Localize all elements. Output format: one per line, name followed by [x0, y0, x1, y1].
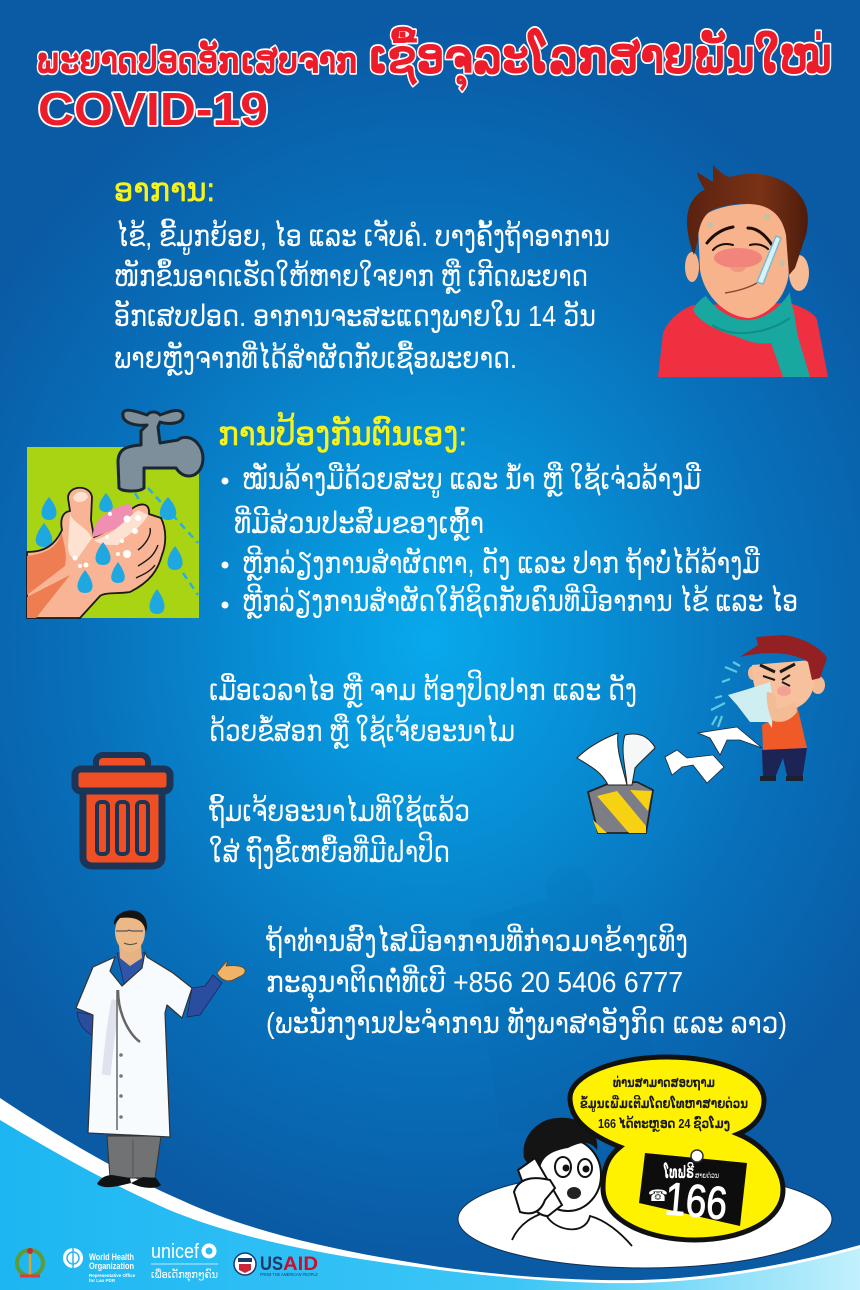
bubble text: ທ່ານສາມາດສອບຖາມ [613, 1075, 715, 1090]
logo: usaid: FROM THE AMERICAN PEOPLE [260, 1272, 318, 1277]
title line one: ພະຍາດປອດອັກເສບຈາກ [36, 40, 358, 81]
bullet one: ໝັ່ນລ້າງມືດ້ວຍສະບູ ແລະ ນ້ຳ ຫຼື ໃຊ້ເຈ່ວລ້າງມື [242, 461, 701, 498]
speech bubble [570, 1057, 783, 1240]
title [36, 27, 832, 135]
logo: who: for Lao PDR [89, 1278, 116, 1283]
bullet two: ຫຼີກລ່ຽງການສຳຜັດຕາ, ດັງ ແລະ ປາກ ຖ້າບໍ່ໄດ້ລ້າງມື [242, 545, 760, 581]
panel: self protection [27, 410, 798, 619]
logo: who: World Health [89, 1252, 134, 1263]
contact text: ກະລຸນາຕິດຕໍ່ທີ່ເບີ +856 20 5406 6777 [266, 965, 683, 1003]
bubble text [580, 1075, 748, 1132]
faint background figures [470, 866, 660, 1140]
cough text [209, 670, 637, 749]
disposal text [208, 794, 470, 869]
logo: usaid: US [260, 1254, 283, 1275]
icon: sneezing man [711, 635, 827, 781]
black sign: ໂທຟຣີ [663, 1161, 695, 1182]
logo: who [63, 1248, 136, 1283]
symptoms text: ໄຂ້, ຂີ້ມູກຍ້ອຍ, ໄອ ແລະ ເຈັບຄໍ. ບາງຄັ້ງຖ້າອາການ [116, 219, 610, 255]
symptoms heading: ອາການ: [114, 171, 215, 208]
logo: unicef [151, 1241, 218, 1282]
bubble text: 166 ໄດ້ຕະຫຼອດ 24 ຊົ່ວໂມງ [598, 1116, 730, 1132]
logos [17, 1241, 318, 1283]
callout: hotline 166 [458, 1057, 832, 1268]
symptoms text [114, 219, 610, 376]
icon: trash can [75, 755, 170, 866]
symptoms text: ພາຍຫຼັງຈາກທີ່ໄດ້ສຳຜັດກັບເຊື້ອພະຍາດ. [114, 341, 517, 376]
logo: usaid: AID [283, 1254, 318, 1275]
logo: who: Organization [89, 1261, 134, 1272]
icon: washing hands with faucet [27, 410, 203, 618]
black sign: ສາຍດ່ວນ [695, 1170, 719, 1180]
logo: unicef: ເພື່ອເດັກທຸກໆຄົນ [151, 1268, 218, 1282]
contact text [265, 924, 787, 1040]
icon: sick man [658, 165, 828, 377]
panel: contact [76, 910, 832, 1268]
foreground water drops [77, 542, 125, 593]
hands [27, 488, 165, 618]
contact text: (ພະນັກງານປະຈຳການ ທັງພາສາອັງກິດ ແລະ ລາວ) [266, 1006, 787, 1040]
bottom swoosh [0, 1098, 860, 1290]
bubble text: ຂໍ້ມູນເພີ່ມເຕີມໂດຍໂທຫາສາຍດ່ວນ [580, 1096, 748, 1112]
icon: boy on phone [512, 1118, 632, 1246]
disposal text: ໃສ່ ຖົງຂີ້ເຫຍື້ອທີ່ມີຝາປິດ [209, 832, 450, 869]
icon: tissue box [577, 733, 655, 833]
disposal text: ຖິ້ມເຈ້ຍອະນາໄມທີ່ໃຊ້ແລ້ວ [208, 794, 470, 828]
icon: doctor [76, 910, 245, 1188]
logo: unicef: unicef [151, 1241, 199, 1263]
symptoms text: ອັກເສບປອດ. ອາການຈະສະແດງພາຍໃນ 14 ວັນ [114, 300, 596, 333]
protection heading: ການປ້ອງກັນຕົນເອງ: [218, 411, 467, 453]
cough text: ດ້ວຍຂໍ້ສອກ ຫຼື ໃຊ້ເຈ້ຍອະນາໄມ [209, 713, 515, 749]
black sign [639, 1150, 747, 1229]
bullet one: ທີ່ມີສ່ວນປະສົມຂອງເຫຼົ້າ [234, 506, 484, 541]
panel: coughing etiquette [75, 635, 827, 869]
panel: symptoms [114, 165, 828, 377]
icon: flying tissues [665, 727, 762, 783]
logo: ministry of health [17, 1248, 43, 1278]
bullet one [222, 461, 701, 541]
logo: usaid [234, 1253, 318, 1277]
white ellipse [458, 1170, 832, 1268]
faucet [118, 410, 203, 491]
cough text: ເມື່ອເວລາໄອ ຫຼື ຈາມ ຕ້ອງປິດປາກ ແລະ ດັງ [209, 670, 637, 708]
background water drops [36, 493, 183, 614]
symptoms text: ໜັກຂຶ້ນອາດເຮັດໃຫ້ຫາຍໃຈຍາກ ຫຼື ເກີດພະຍາດ [114, 258, 588, 294]
contact text: ຖ້າທ່ານສົງໄສມີອາການທີ່ກ່າວມາຂ້າງເທິງ [265, 924, 688, 958]
black sign: 166 [663, 1172, 729, 1229]
logo: who: Representative Office [89, 1273, 136, 1278]
black sign: ☎ [648, 1188, 668, 1205]
title line two: COVID-19 [38, 83, 268, 135]
water dashes [135, 488, 198, 595]
